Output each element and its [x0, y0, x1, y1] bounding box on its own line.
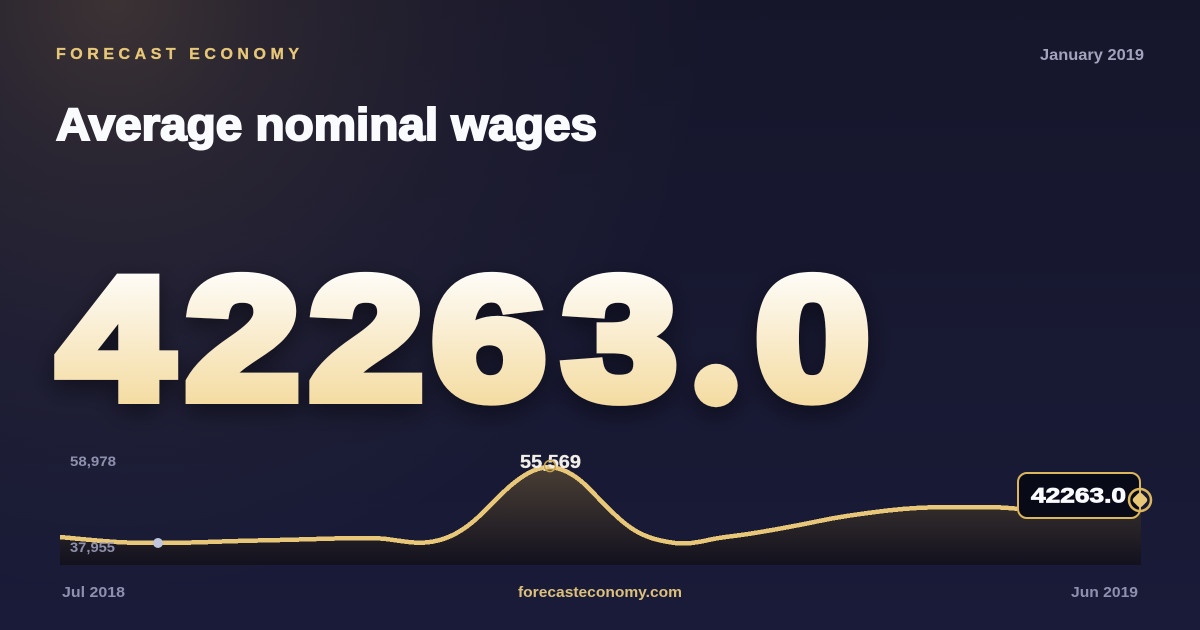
source website: forecasteconomy.com	[518, 584, 682, 601]
brand label: FORECAST ECONOMY	[56, 46, 299, 63]
peak marker	[544, 460, 556, 472]
date label: January 2019	[1040, 47, 1144, 64]
end date label: Jun 2019	[1071, 584, 1138, 601]
chart	[60, 452, 1151, 565]
axis min label: 37,955	[70, 539, 115, 555]
axis max label: 58,978	[70, 453, 116, 469]
start date label: Jul 2018	[62, 584, 125, 601]
big value: 42263	[58, 243, 677, 435]
peak label: 55,569	[520, 452, 581, 472]
current value marker	[1129, 489, 1151, 511]
current value callout	[1018, 473, 1140, 518]
chart line	[60, 467, 1020, 544]
big value: 0	[756, 243, 869, 435]
title: Average nominal wages	[56, 99, 597, 150]
minimum marker	[153, 538, 163, 548]
big value: .	[688, 243, 745, 435]
current value callout: 42263.0	[1031, 484, 1126, 508]
chart area fill	[60, 467, 1141, 565]
